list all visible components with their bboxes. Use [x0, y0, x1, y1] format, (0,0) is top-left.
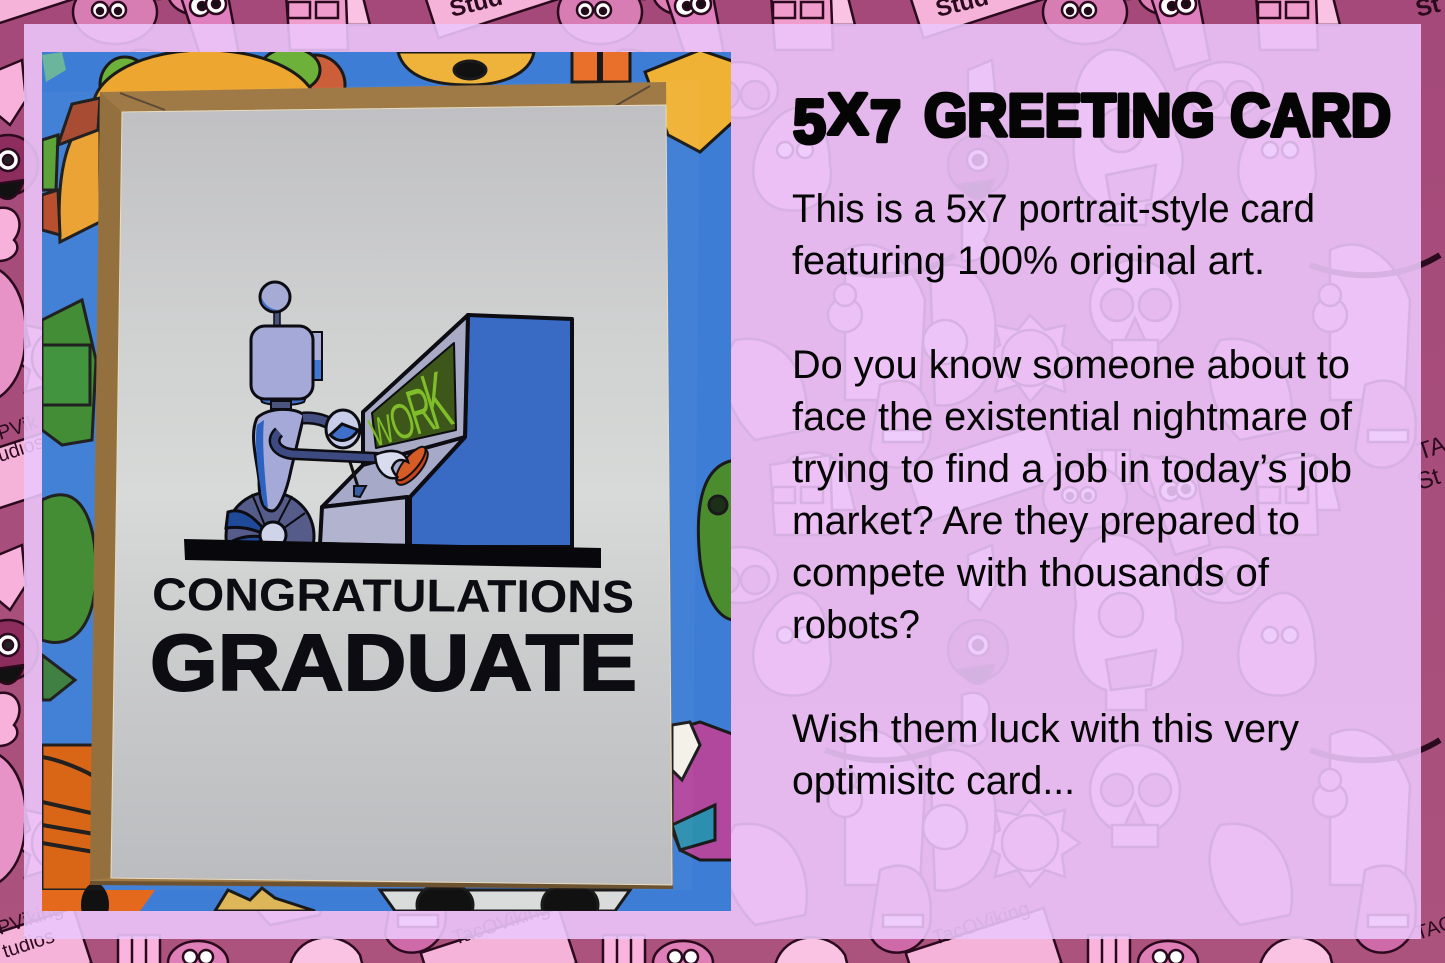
claw: [375, 451, 408, 478]
background pattern border: tudios: [0, 925, 57, 963]
paragraph one: [792, 187, 1315, 283]
title: [793, 82, 1391, 157]
paragraph two: compete with thousands of: [792, 551, 1270, 595]
title: GREETING CARD: [924, 82, 1391, 149]
antenna ball: [260, 282, 290, 312]
paragraph three: optimisitc card...: [792, 759, 1075, 803]
robot torso: [254, 409, 304, 511]
greeting card: [111, 105, 672, 885]
title: X: [828, 82, 868, 147]
paragraph three: Wish them luck with this very: [792, 707, 1299, 751]
robot side panel: [312, 332, 322, 380]
paragraph two: [792, 343, 1353, 647]
paragraph two: Do you know someone about to: [792, 343, 1350, 387]
work screen text: W: [364, 406, 399, 455]
paragraph two: robots?: [792, 603, 920, 647]
work screen text: O: [383, 391, 422, 451]
work screen text: [367, 371, 455, 446]
shoulder hand: [326, 410, 360, 448]
kraft envelope: [90, 82, 673, 884]
backdrop cartoons: [42, 48, 735, 927]
title: 7: [870, 89, 901, 154]
red button: [395, 446, 429, 486]
title: 5: [793, 88, 826, 157]
paragraph two: trying to find a job in today’s job: [792, 447, 1352, 491]
paragraph two: face the existential nightmare of: [792, 395, 1353, 439]
robot wheel: [224, 492, 316, 542]
paragraph one: featuring 100% original art.: [792, 239, 1265, 283]
joystick: [350, 462, 366, 497]
lower arm: [275, 432, 378, 458]
neck: [274, 312, 280, 327]
paragraph one: This is a 5x7 portrait-style card: [792, 187, 1315, 231]
graduate text: GRADUATE: [150, 618, 637, 707]
upper arm: [303, 418, 335, 426]
floor bar: [184, 539, 601, 568]
arcade machine: [320, 315, 572, 547]
work screen text: R: [399, 373, 442, 448]
collar: [260, 398, 306, 406]
photo backdrop: [42, 52, 731, 911]
robot illustration: [226, 282, 572, 580]
plastic sleeve: [42, 80, 700, 890]
background pattern border: TacOViking: [450, 898, 552, 950]
product photo: [42, 48, 735, 927]
paragraph two: market? Are they prepared to: [792, 499, 1300, 543]
congratulations text: CONGRATULATIONS: [152, 568, 634, 623]
background pattern border: St: [1414, 463, 1444, 496]
work screen text: K: [413, 355, 461, 447]
robot head: [251, 326, 313, 399]
background pattern border: TacOViking: [930, 898, 1032, 950]
paragraph three: [792, 707, 1299, 803]
